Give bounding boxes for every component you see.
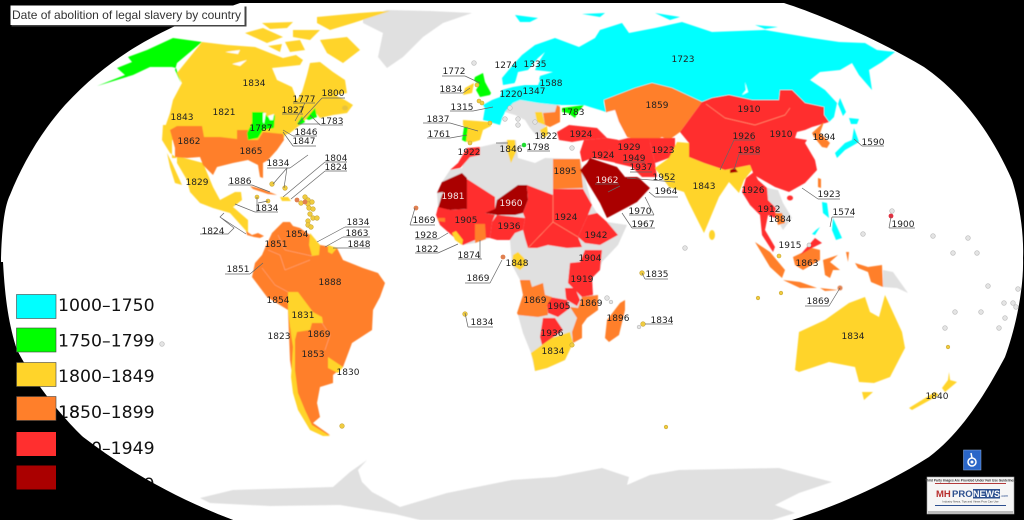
country year labels: 1846: [295, 128, 318, 138]
Sumatra: [755, 242, 785, 278]
Costa Rica and Panama: [246, 231, 264, 238]
Chile: [290, 327, 330, 436]
map: Africa: [436, 140, 627, 371]
Great Bear and Great Slave lakes: [225, 50, 247, 66]
Ethiopia: [578, 213, 618, 245]
MHProNews logo: PRO: [952, 489, 973, 500]
US Midwest: [247, 112, 275, 140]
Mauritania: [437, 173, 467, 210]
New Zealand: [909, 372, 957, 410]
country year labels: 1824: [202, 227, 225, 237]
country year labels: 1949: [623, 154, 646, 164]
Sakhalin: [838, 98, 846, 116]
map: Asia: [557, 83, 957, 410]
Cambodia: [775, 213, 785, 225]
Iran: [602, 138, 657, 177]
Maluku: [846, 252, 849, 262]
country year labels: 1834: [243, 79, 266, 89]
legend text: [58, 296, 155, 495]
Sulawesi: [823, 255, 840, 278]
MHProNews logo: .com: [1000, 494, 1008, 498]
Mozambique: [570, 295, 598, 343]
country year labels: 1761: [428, 130, 450, 140]
country year labels: 1862: [178, 137, 200, 147]
country year labels: 1830: [337, 368, 360, 378]
country year labels: 1834: [842, 332, 865, 342]
country year labels: 1846: [500, 145, 523, 155]
country year labels: 1924: [555, 213, 578, 223]
country year labels: 1905: [455, 216, 477, 226]
country year labels: 1905: [548, 302, 570, 312]
country year labels: 1851: [227, 265, 249, 275]
country year labels: 1888: [319, 278, 342, 288]
country year labels: 1822: [535, 132, 557, 142]
Gambia: [438, 218, 445, 222]
legend text: 1850–1899: [58, 403, 155, 423]
country year labels: 1834: [347, 218, 370, 228]
country year labels: 1859: [646, 101, 669, 111]
map: South America: [252, 222, 385, 436]
West Africa: [436, 179, 495, 245]
China and Mongolia: [680, 90, 829, 192]
country year labels: 1783: [321, 117, 343, 127]
country year labels: 1834: [542, 347, 565, 357]
Saudi Arabia and Gulf states: [580, 158, 650, 218]
map: Europe and Russia: [462, 13, 895, 143]
country year labels: 1926: [742, 186, 765, 196]
Java and Lesser Sunda: [783, 280, 838, 291]
Kenya and Tanzania: [568, 250, 602, 297]
country year labels: 1964: [655, 187, 678, 197]
Crimea and Georgia: [562, 105, 584, 118]
country year labels: 1915: [779, 241, 801, 251]
country year labels: 1869: [580, 299, 603, 309]
Ghana: [475, 224, 486, 243]
country year labels: 1834: [256, 204, 279, 214]
Bhutan: [730, 168, 738, 173]
country year labels: 1274: [495, 61, 518, 71]
country year labels: 1910: [738, 105, 761, 115]
Turkey: [557, 125, 607, 142]
country year labels: 1834: [651, 316, 674, 326]
Gabon: [512, 252, 528, 270]
legend text: 1900–1949: [58, 439, 155, 459]
country year labels: 1824: [325, 163, 348, 173]
Malawi: [565, 288, 580, 306]
country year labels: 1843: [693, 182, 715, 192]
country year labels: 1834: [471, 318, 494, 328]
country year labels: 1823: [268, 332, 290, 342]
title box: [10, 6, 246, 26]
country year labels: 1315: [451, 103, 473, 113]
country year labels: 1936: [541, 329, 564, 339]
country year labels: 1962: [596, 176, 618, 186]
country year labels: [171, 55, 949, 402]
country year labels: 1928: [415, 231, 438, 241]
country year labels: 1958: [738, 146, 761, 156]
mask: black corner over legend: [0, 262, 233, 520]
Australia: [795, 295, 905, 383]
small island dots: [255, 83, 950, 429]
Indochina: [767, 188, 792, 230]
Canada and west coast: [163, 42, 353, 140]
country year labels: 1869: [807, 297, 830, 307]
country year labels: 1981: [442, 192, 464, 202]
Chad and Sudan: [523, 185, 592, 248]
title box: Date of abolition of legal slavery by country: [12, 8, 241, 22]
country year labels: 1831: [292, 311, 314, 321]
Cuba: [250, 186, 277, 195]
country year labels: 1919: [571, 275, 594, 285]
country year labels: 1843: [171, 113, 193, 123]
Mexico: [177, 156, 248, 233]
country year labels: 1895: [554, 167, 576, 177]
country year labels: 1574: [833, 208, 856, 218]
country year labels: 1834: [267, 159, 290, 169]
country year labels: 1924: [570, 130, 593, 140]
country year labels: 1220: [500, 90, 523, 100]
country year labels: 1923: [652, 146, 674, 156]
country year labels: 1840: [926, 392, 949, 402]
country year labels: 1926: [733, 132, 756, 142]
grey southern Europe: [505, 100, 560, 140]
country year labels: 1863: [796, 259, 818, 269]
Arctic islands: [515, 13, 778, 29]
icon: accessibility badge: [964, 450, 981, 470]
legend swatches: [16, 294, 56, 490]
country year labels: 1912: [758, 205, 780, 215]
country year labels: 1900: [892, 220, 915, 230]
country year labels: 1874: [458, 251, 481, 261]
Romania and Bulgaria: [543, 105, 560, 127]
country year labels: 1910: [770, 130, 793, 140]
Baltic sea: [515, 73, 540, 84]
Egypt: [553, 159, 583, 189]
legend text: 1950–1999: [58, 475, 155, 495]
MHProNews logo: Industry News, Tips and Views Pros Can Use: [942, 500, 999, 504]
Liberia and Sierra Leone: [452, 231, 463, 245]
country year labels: 1869: [413, 216, 436, 226]
country year labels: 1851: [265, 240, 287, 250]
grey island dots: [160, 61, 1020, 346]
Botswana: [540, 318, 563, 345]
Iraq and Syria: [580, 138, 617, 163]
Japan: [835, 118, 859, 158]
country year labels: 1783: [562, 108, 584, 118]
MHProNews logo: Third Party Images Are Provided Under Fair Use Guidelines.: [925, 478, 1016, 482]
country year labels: 1590: [862, 138, 885, 148]
country year labels: 1821: [213, 108, 235, 118]
Tasmania: [862, 392, 873, 400]
country year labels: 1960: [500, 199, 523, 209]
Kazakhstan and Central Asia: [604, 83, 702, 143]
country year labels: 1787: [250, 124, 272, 134]
country year labels: 1865: [240, 147, 262, 157]
country year labels: 1835: [646, 270, 668, 280]
country year labels: 1869: [308, 330, 331, 340]
country year labels: 1822: [416, 245, 438, 255]
country year labels: 1848: [348, 240, 371, 250]
country year labels: 1929: [618, 143, 641, 153]
country year labels: 1335: [524, 60, 546, 70]
legend text: 1000–1750: [58, 296, 155, 316]
country year labels: 1886: [229, 177, 252, 187]
country year labels: 1804: [325, 154, 348, 164]
Borneo: [793, 248, 820, 270]
Morocco: [450, 147, 480, 170]
MHProNews logo: MH: [936, 489, 951, 500]
country year labels: 1772: [443, 67, 465, 77]
country year labels: 1854: [286, 230, 309, 240]
Nigeria: [490, 215, 525, 240]
country year labels: 1723: [672, 55, 694, 65]
French Guiana: [328, 245, 337, 254]
mask: black corner over legend: 1850–1899: [58, 403, 155, 423]
leader lines: [200, 76, 915, 327]
Greece: [540, 126, 548, 138]
country year labels: 1798: [527, 143, 550, 153]
country year labels: 1854: [267, 296, 290, 306]
country year labels: 1942: [585, 231, 607, 241]
MHProNews logo: NEWS: [973, 489, 1000, 499]
Hispaniola: [280, 197, 291, 201]
country year labels: 1853: [302, 350, 324, 360]
Niger: [485, 185, 528, 215]
Korea: [812, 122, 830, 148]
country year labels: 1894: [813, 133, 836, 143]
Britain: [474, 73, 491, 97]
Tunisia: [507, 140, 516, 163]
Uruguay: [328, 357, 343, 373]
Arctic islands: [317, 11, 390, 30]
Caspian Sea: [607, 110, 627, 140]
country year labels: 1827: [282, 106, 304, 116]
Ireland: [463, 83, 474, 95]
Iberia: [462, 120, 491, 143]
map: Greenland and Antarctica (no data): [200, 10, 832, 520]
country year labels: 1863: [346, 229, 368, 239]
Hainan: [787, 196, 793, 200]
country year labels: 1923: [818, 190, 840, 200]
country year labels: 1847: [293, 137, 315, 147]
South Africa: [531, 332, 573, 371]
country year labels: 1884: [769, 215, 792, 225]
Angola: [517, 280, 552, 317]
country year labels: 1904: [579, 254, 602, 264]
country year labels: 1970: [629, 207, 652, 217]
India and Pakistan: [655, 142, 752, 233]
country year labels: 1922: [458, 148, 480, 158]
New England states: [297, 116, 305, 125]
MHProNews logo: [925, 477, 1016, 514]
country year labels: 1347: [523, 87, 545, 97]
country year labels: 1869: [467, 274, 490, 284]
country year labels: 1869: [524, 296, 547, 306]
New Guinea: [855, 263, 883, 287]
country year labels: 1777: [293, 95, 315, 105]
orange and red island dots: [295, 143, 893, 259]
Baja California: [167, 153, 182, 185]
country year labels: 1936: [498, 222, 521, 232]
map: North America: [97, 11, 390, 238]
Afghanistan: [649, 138, 675, 163]
country year labels: 1834: [440, 85, 463, 95]
legend text: 1750–1799: [58, 332, 155, 352]
Madagascar: [605, 300, 625, 342]
country year labels: 1896: [607, 314, 630, 324]
country year labels: 1588: [540, 79, 563, 89]
country year labels: 1967: [632, 220, 654, 230]
US South: [170, 126, 284, 178]
Zambia: [547, 297, 570, 317]
Serbia area: [535, 112, 545, 125]
country year labels: 1952: [653, 173, 675, 183]
legend text: 1800–1849: [58, 367, 155, 387]
country year labels: 1837: [427, 115, 449, 125]
Guyana: [309, 233, 320, 256]
country year labels: 1848: [506, 259, 529, 269]
Alaska: [97, 38, 202, 86]
country year labels: 1829: [186, 178, 209, 188]
country year labels: 1800: [322, 89, 345, 99]
Philippines: [812, 202, 842, 240]
country year labels: 1937: [630, 163, 652, 173]
US west coast strip: [162, 125, 177, 158]
Taiwan: [818, 178, 821, 188]
internal borders: [262, 235, 330, 350]
country year labels: 1924: [592, 151, 615, 161]
Lake Baikal: [742, 82, 748, 95]
Bolivia: [288, 292, 323, 340]
Myanmar Thailand Malaya: [742, 172, 778, 252]
